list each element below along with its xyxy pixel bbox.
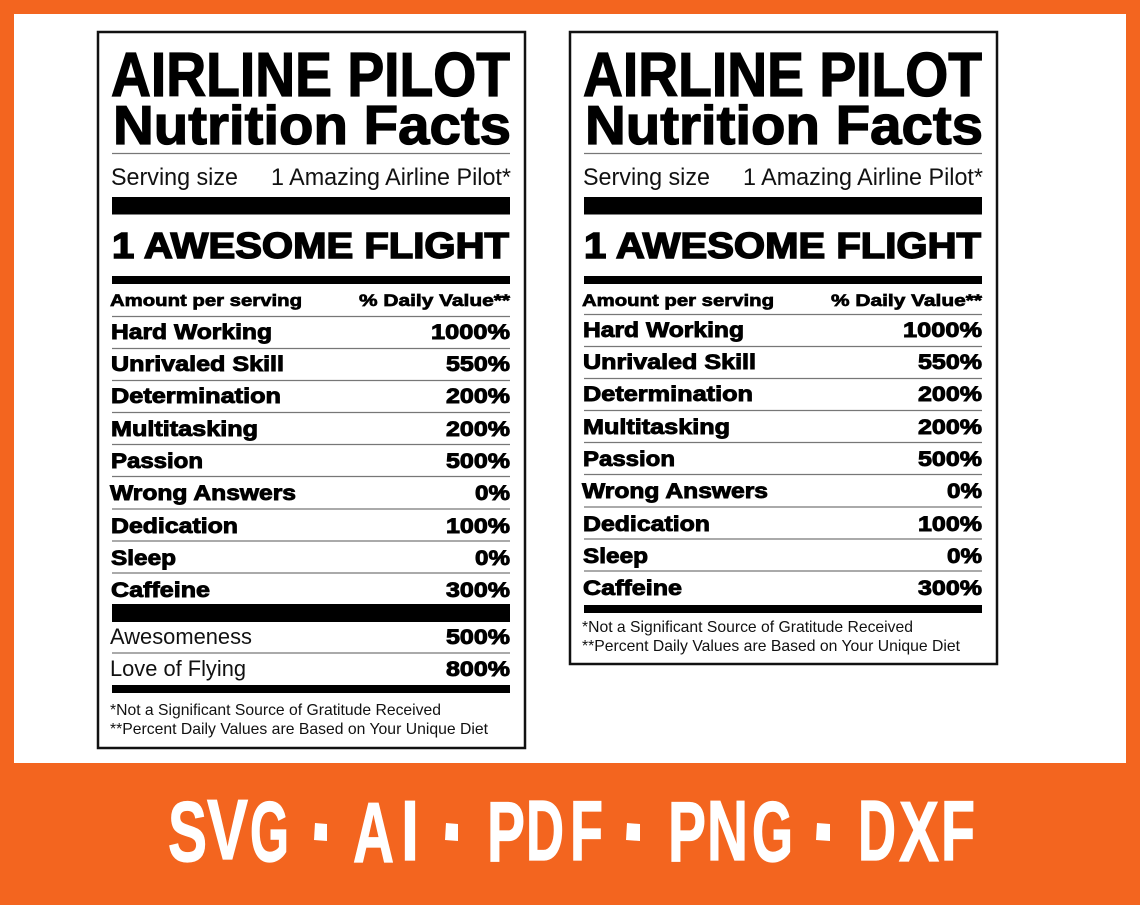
row: hard working: Hard Working [111, 321, 272, 344]
serving size label: Serving size [111, 164, 238, 191]
footnote 2: **Percent Daily Values are Based on Your Unique Diet [582, 638, 961, 655]
row: dedication [583, 513, 982, 536]
format: dxf: D [858, 784, 896, 879]
row: determination: Determination [583, 383, 753, 406]
row: multitasking: 200% [918, 416, 982, 439]
row: multitasking: Multitasking [111, 418, 258, 441]
column header: amount: Amount per serving [110, 291, 302, 310]
format: dxf: X [899, 785, 939, 880]
row: sleep: Sleep [111, 547, 176, 570]
row: sleep: 0% [475, 547, 510, 570]
heading: airline pilot: AIRLINE PILOT [583, 41, 982, 110]
row: passion: 500% [918, 448, 982, 471]
row: wrong answers: Wrong Answers [582, 480, 768, 503]
row: passion: Passion [583, 448, 675, 471]
row: dedication: Dedication [111, 515, 238, 538]
format: pdf: P [487, 785, 525, 880]
row: passion: 500% [446, 450, 510, 473]
row: caffeine [583, 577, 982, 600]
heading: nutrition facts: Nutrition Facts [585, 94, 983, 156]
row: hard working: Hard Working [583, 319, 744, 342]
row: determination: Determination [111, 385, 281, 408]
footnote 1: *Not a Significant Source of Gratitude Received [582, 619, 913, 636]
row: unrivaled skill: 550% [446, 353, 510, 376]
row: unrivaled skill: Unrivaled Skill [583, 351, 756, 374]
row: sleep: Sleep [583, 545, 648, 568]
row: multitasking [583, 416, 982, 439]
separator dot [445, 823, 458, 841]
row: passion: Passion [111, 450, 203, 473]
row: sleep: 0% [947, 545, 982, 568]
row: multitasking: 200% [446, 418, 510, 441]
row: dedication: 100% [918, 513, 982, 536]
heading: nutrition facts: Nutrition Facts [113, 94, 511, 156]
row: sleep [583, 545, 982, 568]
row: dedication: Dedication [583, 513, 710, 536]
row: determination: 200% [918, 383, 982, 406]
format: pdf [487, 784, 603, 880]
row: wrong answers: 0% [947, 480, 982, 503]
row: unrivaled skill [111, 353, 510, 376]
row: hard working [111, 321, 510, 344]
row: unrivaled skill [583, 351, 982, 374]
row: wrong answers: Wrong Answers [110, 482, 296, 505]
thick bar [112, 197, 510, 214]
bar [584, 605, 982, 613]
row: passion [583, 448, 982, 471]
row: sleep [111, 547, 510, 570]
column header: amount: Amount per serving [582, 291, 774, 310]
separator dot [314, 823, 327, 841]
thick bar [584, 197, 982, 214]
row: caffeine: 300% [918, 577, 982, 600]
subheading: awesome flight: 1 AWESOME FLIGHT [112, 225, 509, 266]
panel border [570, 32, 997, 664]
serving size value: 1 Amazing Airline Pilot* [743, 164, 983, 191]
format: png: P [668, 785, 706, 880]
format: svg: S [168, 785, 207, 880]
separator dot [626, 823, 640, 841]
format: png: G [752, 785, 793, 880]
row: love of flying [110, 656, 510, 681]
column header: daily value: % Daily Value** [359, 291, 510, 310]
row: unrivaled skill: Unrivaled Skill [111, 353, 284, 376]
row: hard working: 1000% [431, 321, 510, 344]
row: dedication [111, 515, 510, 538]
format: svg: V [207, 783, 248, 878]
bar [112, 276, 510, 284]
row: wrong answers [582, 480, 982, 503]
heading: airline pilot: AIRLINE PILOT [111, 41, 510, 110]
format: ai: I [401, 784, 419, 879]
format: pdf: F [570, 784, 603, 879]
footnote 1: *Not a Significant Source of Gratitude Received [110, 702, 441, 719]
panel border [98, 32, 525, 748]
format: svg: G [250, 785, 289, 880]
row: hard working [583, 319, 982, 342]
format: svg [168, 783, 289, 880]
separator dot [816, 823, 830, 841]
row: caffeine: Caffeine [111, 579, 210, 602]
format: png: N [707, 784, 748, 879]
row: love of flying: Love of Flying [110, 656, 246, 681]
format: ai: A [353, 786, 394, 881]
row: awesomeness [110, 624, 510, 649]
row: caffeine [111, 579, 510, 602]
serving size value: 1 Amazing Airline Pilot* [271, 164, 511, 191]
row: hard working: 1000% [903, 319, 982, 342]
format: dxf [858, 784, 975, 880]
row: awesomeness: 500% [446, 626, 510, 649]
column header: daily value: % Daily Value** [831, 291, 982, 310]
row: multitasking: Multitasking [583, 416, 730, 439]
format: png [668, 784, 793, 880]
row: passion [111, 450, 510, 473]
banner: file formats [168, 783, 975, 881]
serving size label: Serving size [583, 164, 710, 191]
row: determination [111, 385, 510, 408]
row: determination: 200% [446, 385, 510, 408]
thick bar [112, 604, 510, 622]
row: dedication: 100% [446, 515, 510, 538]
row: love of flying: 800% [446, 658, 510, 681]
row: awesomeness: Awesomeness [110, 624, 252, 649]
footnote 2: **Percent Daily Values are Based on Your Unique Diet [110, 721, 489, 738]
format: dxf: F [941, 784, 975, 879]
subheading: awesome flight: 1 AWESOME FLIGHT [584, 225, 981, 266]
row: caffeine: 300% [446, 579, 510, 602]
panel: full nutrition label [98, 32, 525, 748]
row: wrong answers: 0% [475, 482, 510, 505]
row: unrivaled skill: 550% [918, 351, 982, 374]
panel: short nutrition label [570, 32, 997, 664]
format: pdf: D [526, 784, 564, 879]
bar [112, 685, 510, 693]
bar [584, 276, 982, 284]
row: determination [583, 383, 982, 406]
row: wrong answers [110, 482, 510, 505]
row: multitasking [111, 418, 510, 441]
row: caffeine: Caffeine [583, 577, 682, 600]
